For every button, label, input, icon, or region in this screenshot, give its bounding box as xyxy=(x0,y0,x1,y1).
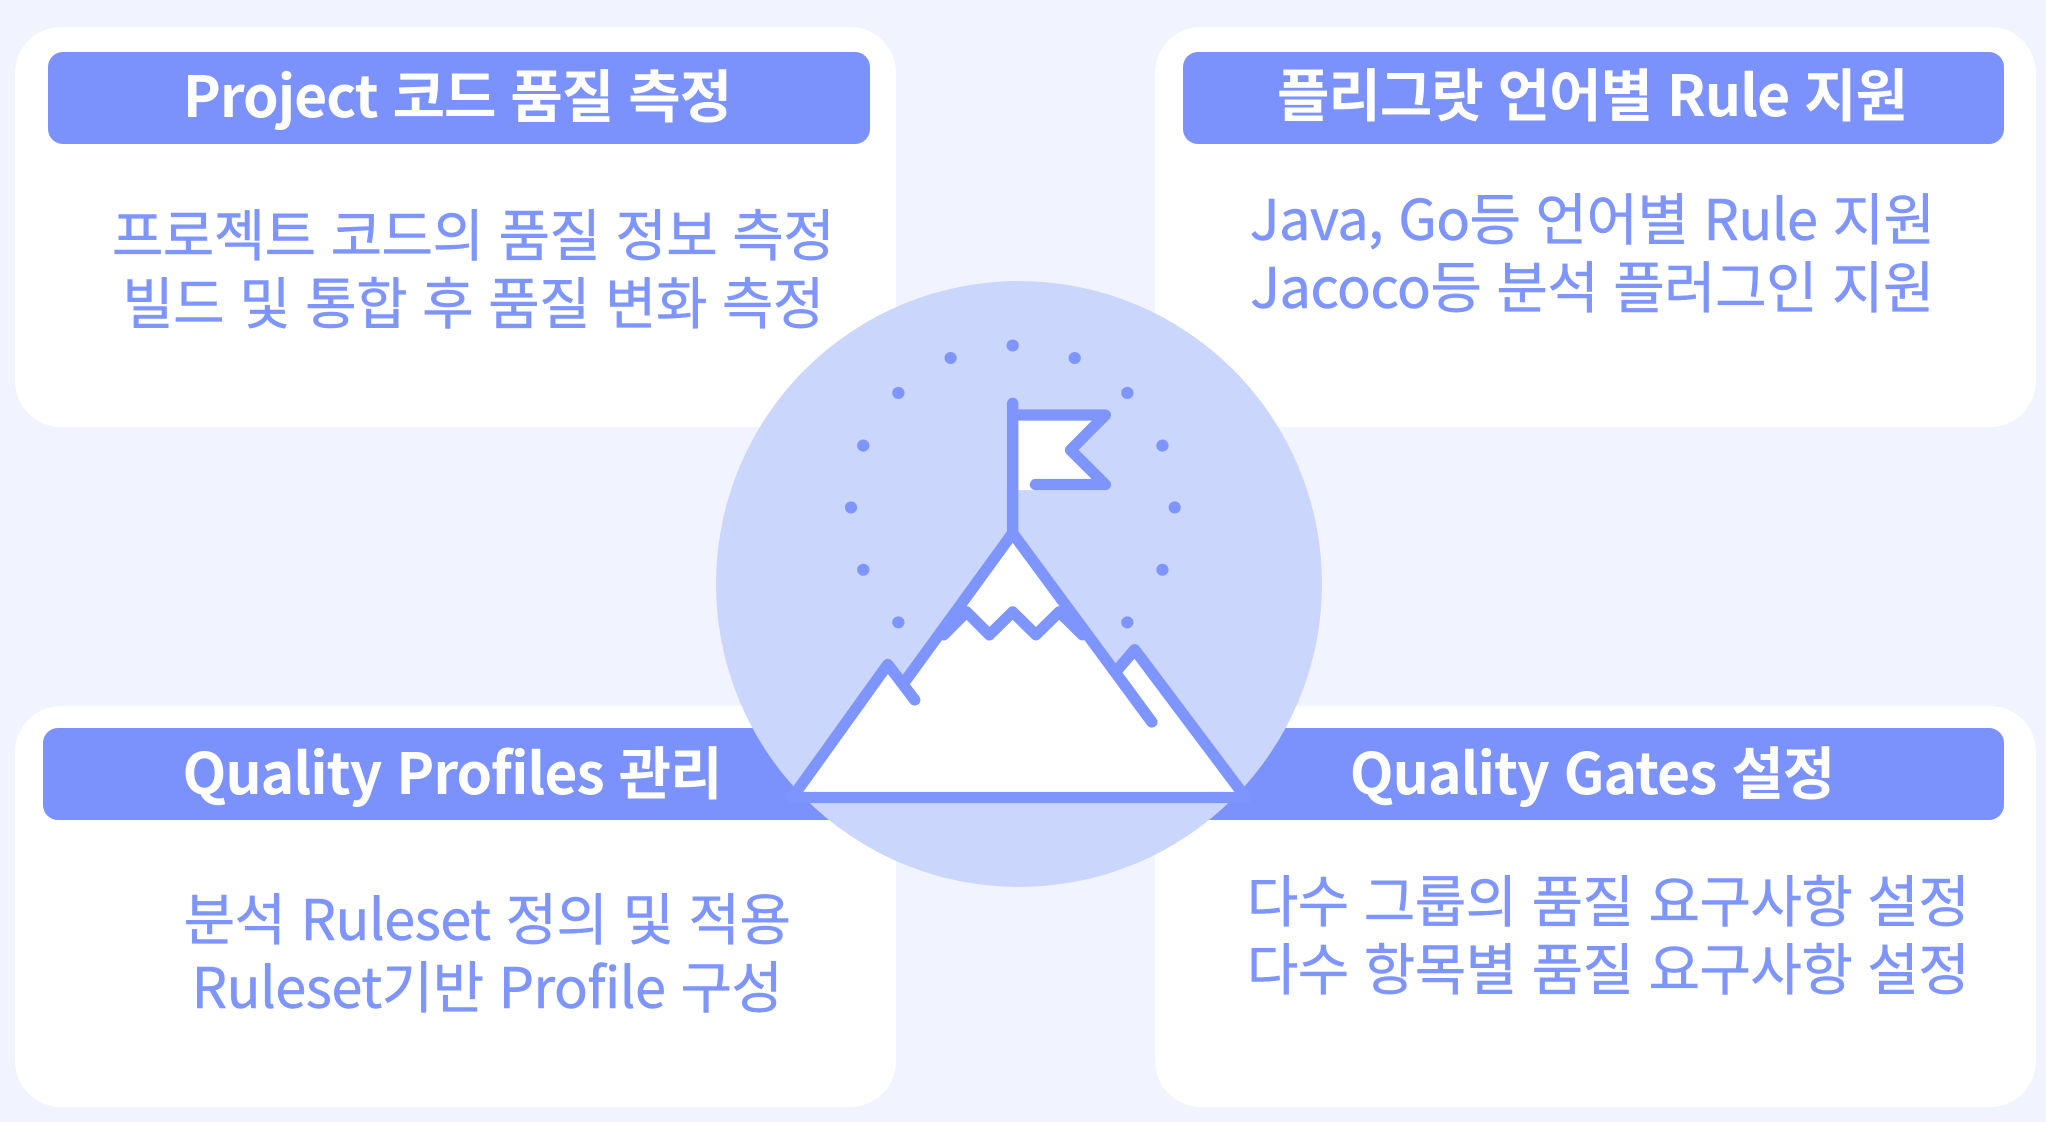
text: polyglot rules: Jacoco등 분석 플러그인 지원 xyxy=(1250,244,1934,325)
text: polyglot rules xyxy=(1250,176,1934,325)
text: project code quality: 빌드 및 통합 후 품질 변화 측정 xyxy=(122,260,824,341)
text: quality profiles: 분석 Ruleset 정의 및 적용 xyxy=(184,876,790,957)
heading: quality gates: Quality Gates 설정 xyxy=(1350,729,1834,811)
panel: polyglot rules xyxy=(1155,27,2036,427)
text: quality gates: 다수 그룹의 품질 요구사항 설정 xyxy=(1247,858,1969,939)
header bar: quality profiles xyxy=(43,728,870,820)
panel: quality gates xyxy=(1155,706,2036,1107)
icon: flag xyxy=(1013,403,1105,533)
text: quality profiles xyxy=(184,876,790,1025)
header bar: quality gates xyxy=(1183,728,2004,820)
heading: polyglot rules: 플리그랏 언어별 Rule 지원 xyxy=(1277,51,1907,133)
text: project code quality: 프로젝트 코드의 품질 정보 측정 xyxy=(112,192,834,273)
text: polyglot rules: Java, Go등 언어별 Rule 지원 xyxy=(1250,176,1934,257)
panel: quality profiles xyxy=(15,706,896,1107)
text: quality profiles: Ruleset기반 Profile 구성 xyxy=(192,944,782,1025)
icon: dots arc xyxy=(845,340,1181,628)
icon: mountains xyxy=(792,533,1246,798)
header bar: project code quality xyxy=(48,52,870,144)
panel: project code quality xyxy=(15,27,896,427)
text: quality gates: 다수 항목별 품질 요구사항 설정 xyxy=(1247,926,1969,1007)
heading: quality profiles: Quality Profiles 관리 xyxy=(182,729,722,811)
text: quality gates xyxy=(1247,858,1969,1007)
icon: mountain with flag xyxy=(794,340,1244,804)
header bar: polyglot rules xyxy=(1183,52,2004,144)
heading: project code quality: Project 코드 품질 측정 xyxy=(183,52,731,134)
text: project code quality xyxy=(112,192,834,341)
central circle xyxy=(716,281,1322,887)
